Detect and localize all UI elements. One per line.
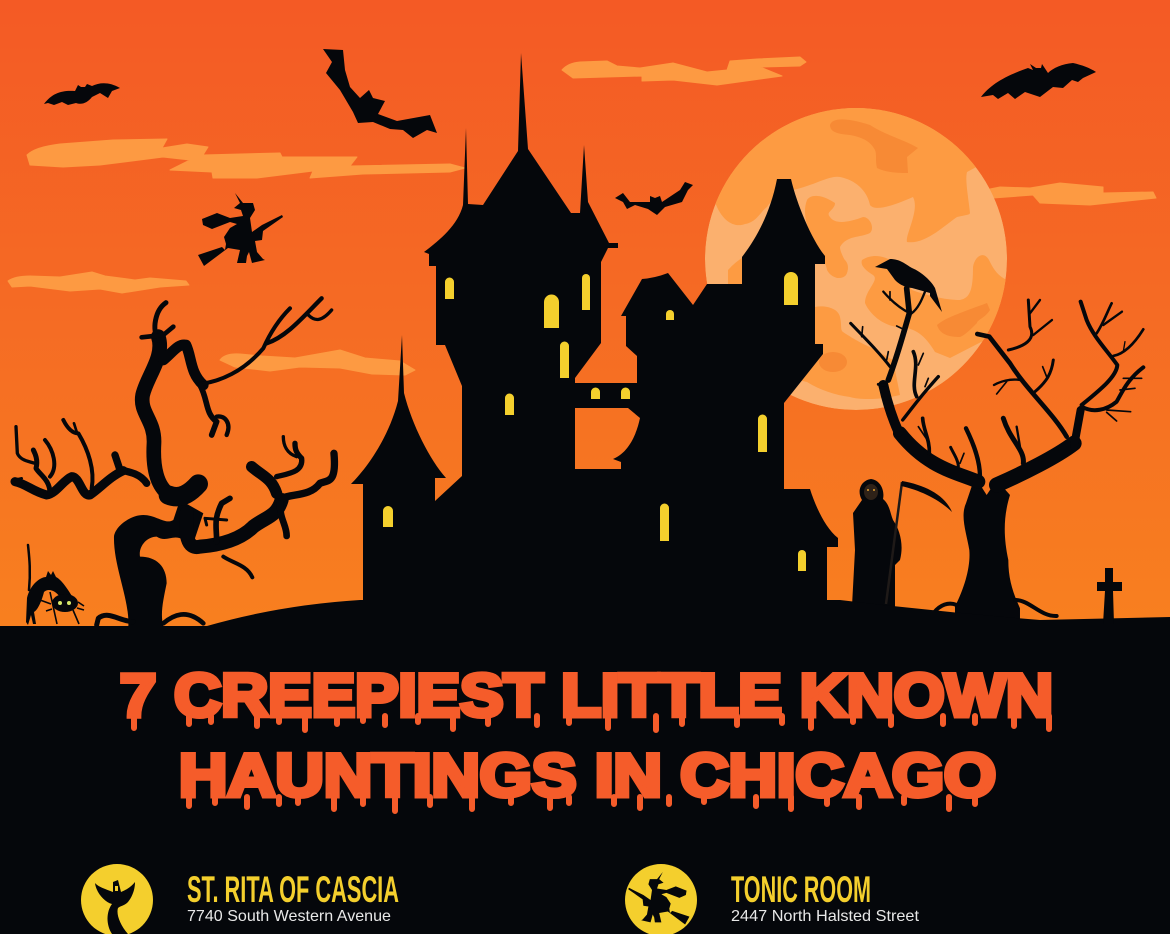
listing: St. Rita of Cascia [81, 864, 399, 934]
icon: ghost on yellow circle [81, 864, 153, 934]
icon: witch on yellow circle [625, 864, 697, 934]
bat: large top [323, 49, 437, 138]
black ground [0, 600, 1170, 934]
listing: Tonic Room [625, 864, 920, 934]
heading: ST. RITA OF CASCIA [187, 869, 399, 910]
sky background [0, 0, 1170, 630]
icon: flying witch [198, 193, 283, 266]
bat: centre [615, 182, 693, 215]
title: HAUNTINGS IN CHICAGO [179, 742, 996, 809]
haunted castle [351, 53, 838, 600]
dead tree: left [15, 298, 334, 627]
title: 7 CREEPIEST LITTLE KNOWN [120, 662, 1053, 729]
address: 7740 South Western Avenue [187, 908, 391, 925]
grim reaper [852, 479, 952, 608]
black cat [26, 545, 84, 625]
dead tree: right [851, 288, 1143, 627]
title drips [134, 716, 1049, 811]
bat: top right [981, 63, 1096, 99]
title [120, 662, 1053, 811]
heading: TONIC ROOM [731, 869, 871, 910]
windows [383, 272, 806, 571]
crow [875, 259, 942, 312]
address: 2447 North Halsted Street [731, 908, 920, 925]
moon [700, 90, 1012, 410]
grave cross [1097, 568, 1122, 624]
clouds [8, 57, 1156, 375]
bat: top left [44, 83, 120, 105]
